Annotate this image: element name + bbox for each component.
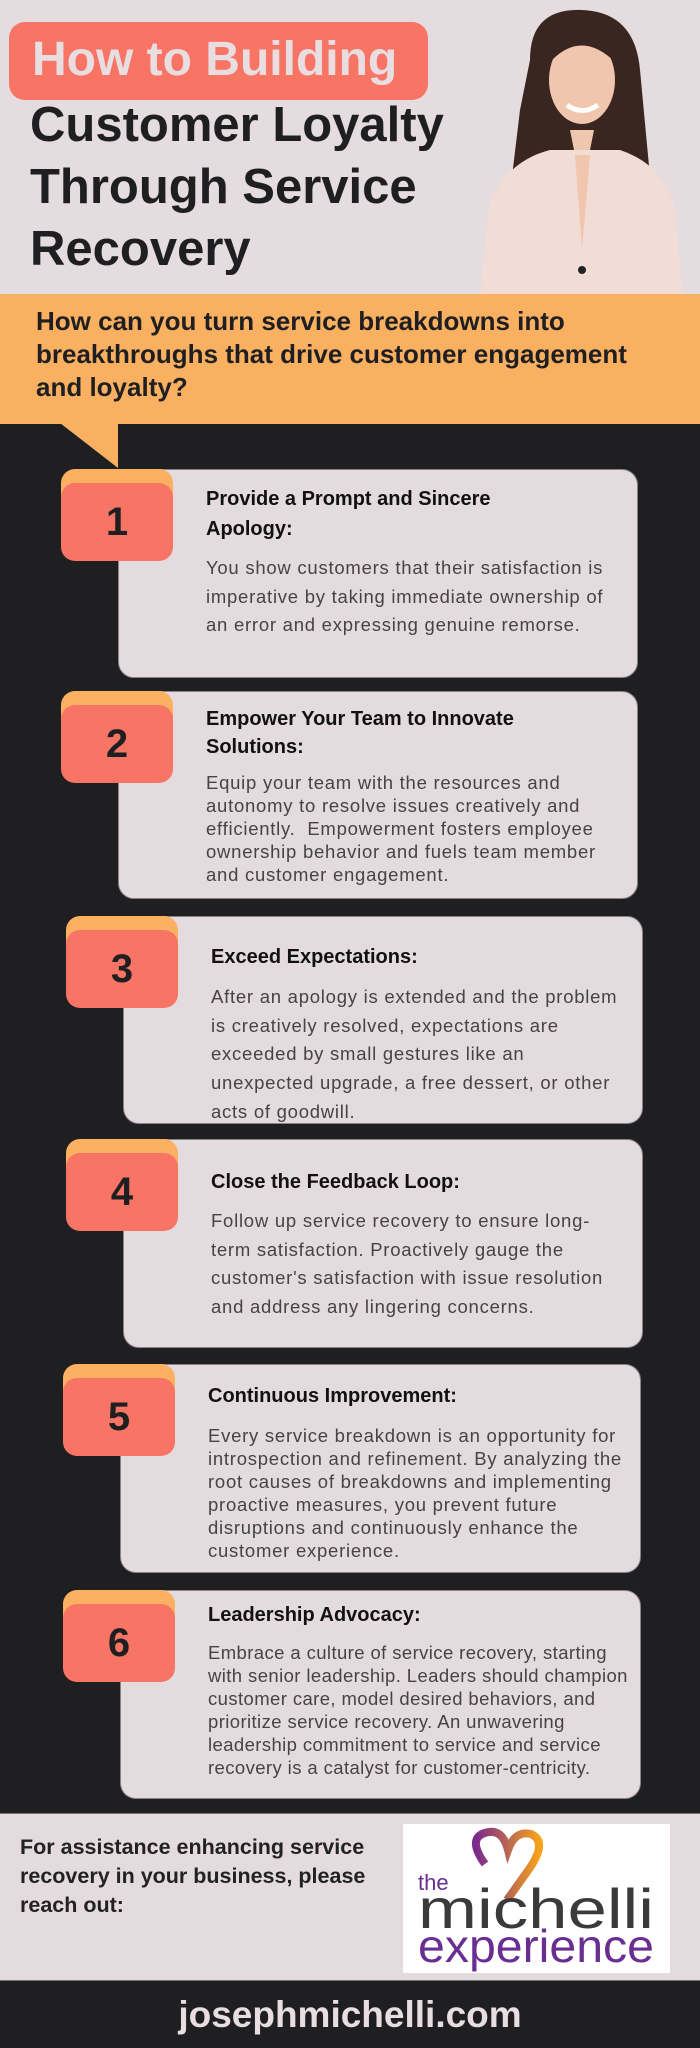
card 1: Apology: <box>206 518 293 540</box>
card 4: term satisfaction. Proactively gauge the <box>211 1239 564 1260</box>
photo: smiling woman <box>480 10 682 294</box>
card 5: Every service breakdown is an opportunity for <box>208 1425 616 1446</box>
title: Through Service <box>30 160 417 214</box>
speech tail <box>61 424 118 468</box>
card 3: is creatively resolved, expectations are <box>211 1015 559 1036</box>
card 4: Follow up service recovery to ensure long- <box>211 1210 590 1231</box>
card 2: Equip your team with the resources and <box>206 772 560 793</box>
card 2: Empower Your Team to Innovate <box>206 708 514 730</box>
badge 3 <box>66 916 178 1008</box>
logo: experience <box>418 1920 654 1972</box>
badge 2: 2 <box>106 722 128 766</box>
badge 1 <box>61 469 173 561</box>
badge 1: 1 <box>106 500 128 544</box>
card 6: leadership commitment to service and service <box>208 1734 601 1755</box>
question band: breakthroughs that drive customer engagement <box>36 339 627 369</box>
card 5: customer experience. <box>208 1540 400 1561</box>
card 3: After an apology is extended and the problem <box>211 986 617 1007</box>
header background <box>0 0 700 294</box>
card 3: acts of goodwill. <box>211 1101 355 1122</box>
card 3: unexpected upgrade, a free dessert, or other <box>211 1072 610 1093</box>
logo <box>403 1824 670 1973</box>
badge 6: 6 <box>108 1621 130 1665</box>
contact text: reach out: <box>20 1893 124 1917</box>
badge 4 <box>66 1139 178 1231</box>
badge 4: 4 <box>111 1170 133 1214</box>
question band: and loyalty? <box>36 372 188 402</box>
contact text: For assistance enhancing service <box>20 1835 364 1859</box>
card 1: imperative by taking immediate ownership of <box>206 586 603 607</box>
card 1: an error and expressing genuine remorse. <box>206 614 580 635</box>
card 4: and address any lingering concerns. <box>211 1296 534 1317</box>
logo: the <box>418 1870 449 1895</box>
card 2: efficiently. Empowerment fosters employee <box>206 818 594 839</box>
card 1 <box>61 469 638 678</box>
card 1: You show customers that their satisfaction is <box>206 557 603 578</box>
card 3 <box>66 916 643 1124</box>
website: josephmichelli.com <box>178 1994 522 2035</box>
card 5: Continuous Improvement: <box>208 1385 457 1407</box>
title: Recovery <box>30 222 251 276</box>
card 4: Close the Feedback Loop: <box>211 1171 460 1193</box>
logo: michelli <box>418 1877 654 1940</box>
card 6: with senior leadership. Leaders should champion <box>208 1665 628 1686</box>
card 5: root causes of breakdowns and implementing <box>208 1471 612 1492</box>
question band: How can you turn service breakdowns into <box>36 306 565 336</box>
card 5: introspection and refinement. By analyzing the <box>208 1448 622 1469</box>
card 5 <box>63 1364 641 1573</box>
card 2: and customer engagement. <box>206 864 449 885</box>
title: Customer Loyalty <box>30 98 444 152</box>
badge 5: 5 <box>108 1395 130 1439</box>
card 5: proactive measures, you prevent future <box>208 1494 557 1515</box>
card 6: recovery is a catalyst for customer-centricity. <box>208 1757 590 1778</box>
card 6 <box>63 1590 641 1799</box>
card 4 <box>66 1139 643 1348</box>
contact text: recovery in your business, please <box>20 1864 365 1888</box>
card 2 <box>61 691 638 899</box>
contact text <box>20 1835 365 1917</box>
card 3: Exceed Expectations: <box>211 946 418 968</box>
badge 6 <box>63 1590 175 1682</box>
title <box>30 98 444 276</box>
badge 5 <box>63 1364 175 1456</box>
card 6: Leadership Advocacy: <box>208 1604 421 1626</box>
badge 3: 3 <box>111 947 133 991</box>
card 1: Provide a Prompt and Sincere <box>206 488 491 510</box>
card 5: disruptions and continuously enhance the <box>208 1517 578 1538</box>
title pill: How to Building <box>32 33 397 86</box>
card 6: Embrace a culture of service recovery, starting <box>208 1642 607 1663</box>
question band <box>0 294 700 424</box>
card 6: customer care, model desired behaviors, and <box>208 1688 595 1709</box>
badge 2 <box>61 691 173 783</box>
card 2: ownership behavior and fuels team member <box>206 841 596 862</box>
card 6: prioritize service recovery. An unwavering <box>208 1711 565 1732</box>
card 2: autonomy to resolve issues creatively and <box>206 795 580 816</box>
card 3: exceeded by small gestures like an <box>211 1043 524 1064</box>
footer contact panel <box>0 1813 700 1981</box>
card 4: customer's satisfaction with issue resolution <box>211 1267 603 1288</box>
card 2: Solutions: <box>206 736 304 758</box>
title pill <box>9 22 428 100</box>
